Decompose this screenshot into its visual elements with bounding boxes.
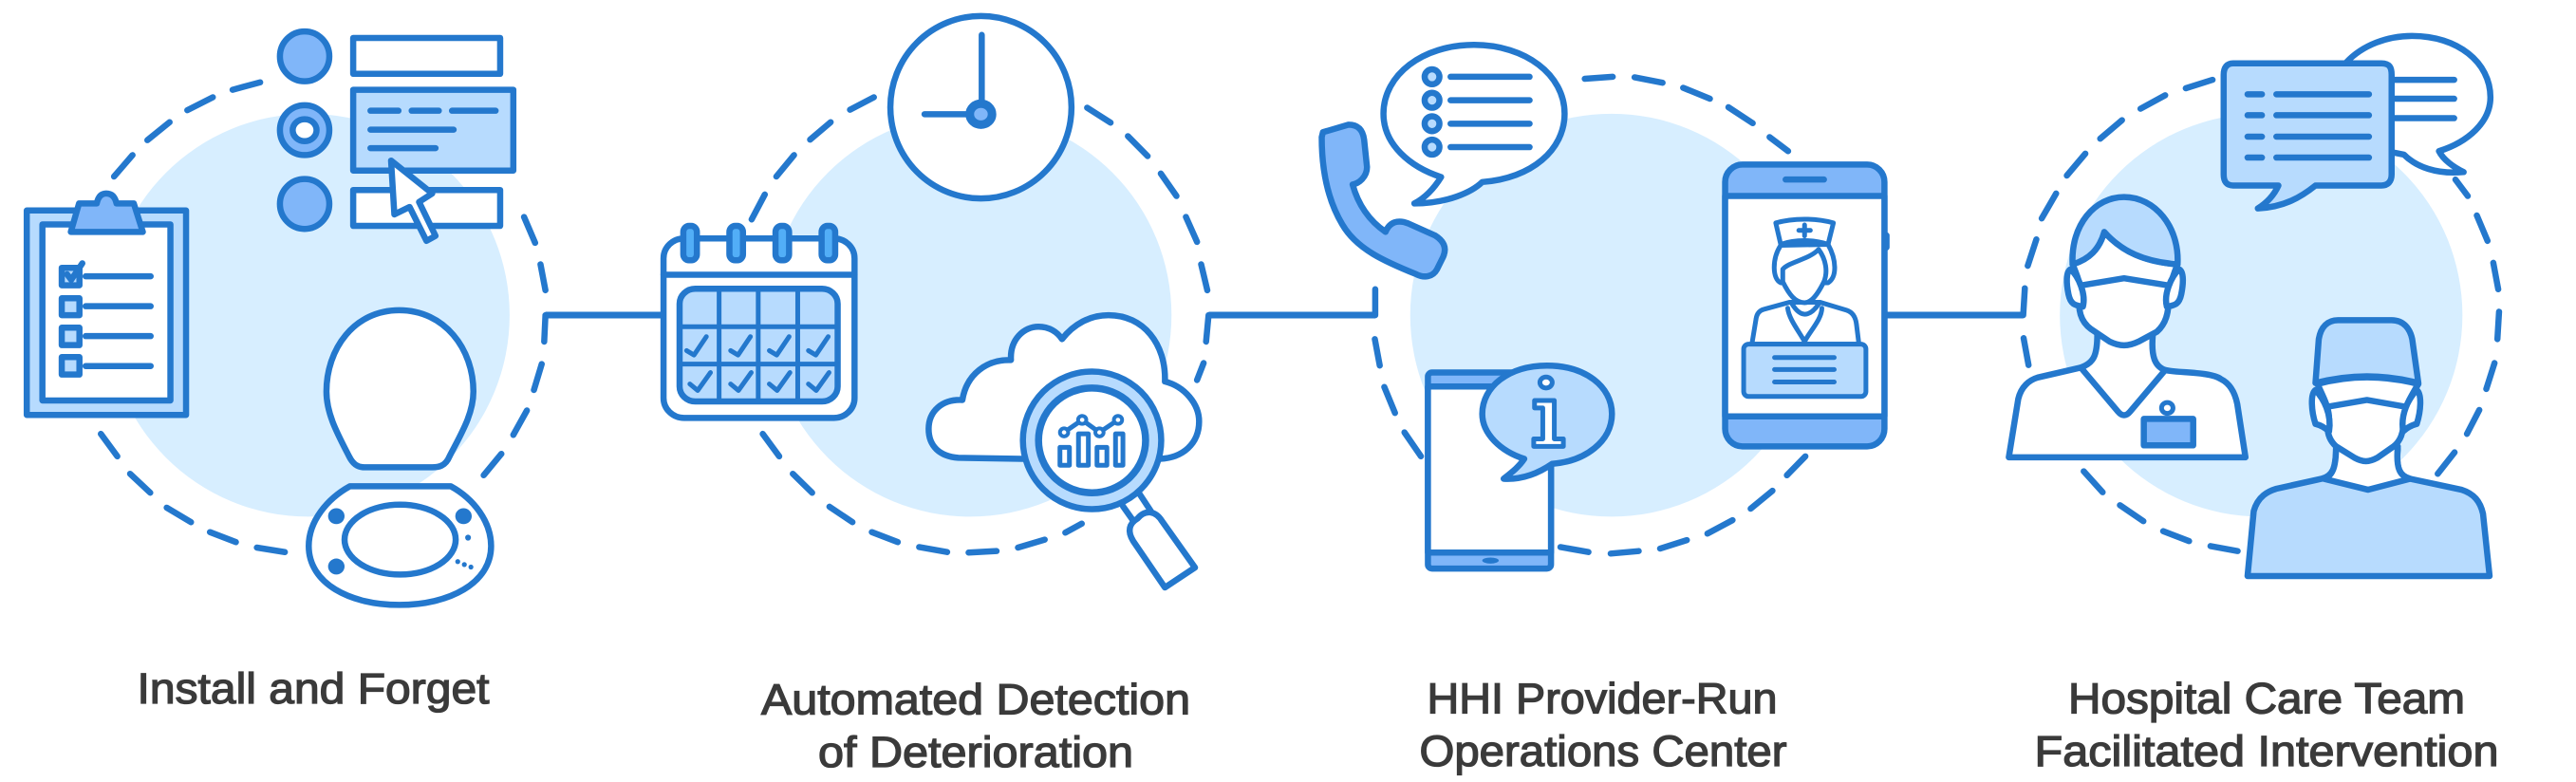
caption: operations center: Operations Center	[1420, 727, 1787, 775]
connector 2	[1209, 311, 1375, 319]
dashed ring	[752, 97, 1208, 552]
caption: operations center: HHI Provider-Run	[1428, 674, 1777, 723]
panel: provider-run operations center	[1322, 45, 1887, 775]
caption: automated detection: Automated Detection	[761, 676, 1190, 723]
background disk	[107, 114, 510, 516]
background disk	[2060, 114, 2462, 516]
connector 1	[546, 311, 664, 319]
icon: cloud with magnifier	[928, 315, 1199, 587]
panel: install and forget	[27, 31, 546, 713]
panel: automated detection	[663, 16, 1208, 776]
icon: clock	[890, 16, 1072, 198]
icon: calendar	[663, 226, 854, 418]
caption: install and forget: Install and Forget	[137, 664, 490, 713]
icon: form options with cursor	[280, 31, 513, 241]
background disk	[769, 114, 1171, 516]
panel: hospital care team	[2008, 36, 2499, 775]
icon: tablet with info bubble	[1428, 365, 1612, 568]
icon: speech bubble with list	[1384, 45, 1564, 203]
caption: hospital care team: Hospital Care Team	[2068, 674, 2465, 723]
connector 3	[1886, 311, 2024, 319]
icon: monitoring seat	[308, 310, 491, 605]
caption: hospital care team: Facilitated Intervention	[2035, 727, 2498, 775]
caption: automated detection: of Deterioration	[818, 728, 1133, 776]
icon: smartphone with nurse	[1726, 164, 1887, 446]
caption: operations center	[1420, 674, 1787, 775]
icon: telephone handset	[1322, 124, 1445, 276]
caption: automated detection	[761, 676, 1190, 776]
background disk	[1410, 114, 1813, 516]
dashed ring	[2024, 80, 2499, 551]
dashed ring	[101, 83, 546, 552]
icon: nurse with mask	[2008, 197, 2246, 457]
icon: clipboard checklist	[27, 194, 186, 415]
icon: overlapping speech bubbles	[2224, 36, 2491, 209]
caption: hospital care team	[2035, 674, 2498, 775]
icon: surgeon with cap and mask	[2248, 320, 2490, 576]
dashed ring	[1374, 77, 1805, 553]
